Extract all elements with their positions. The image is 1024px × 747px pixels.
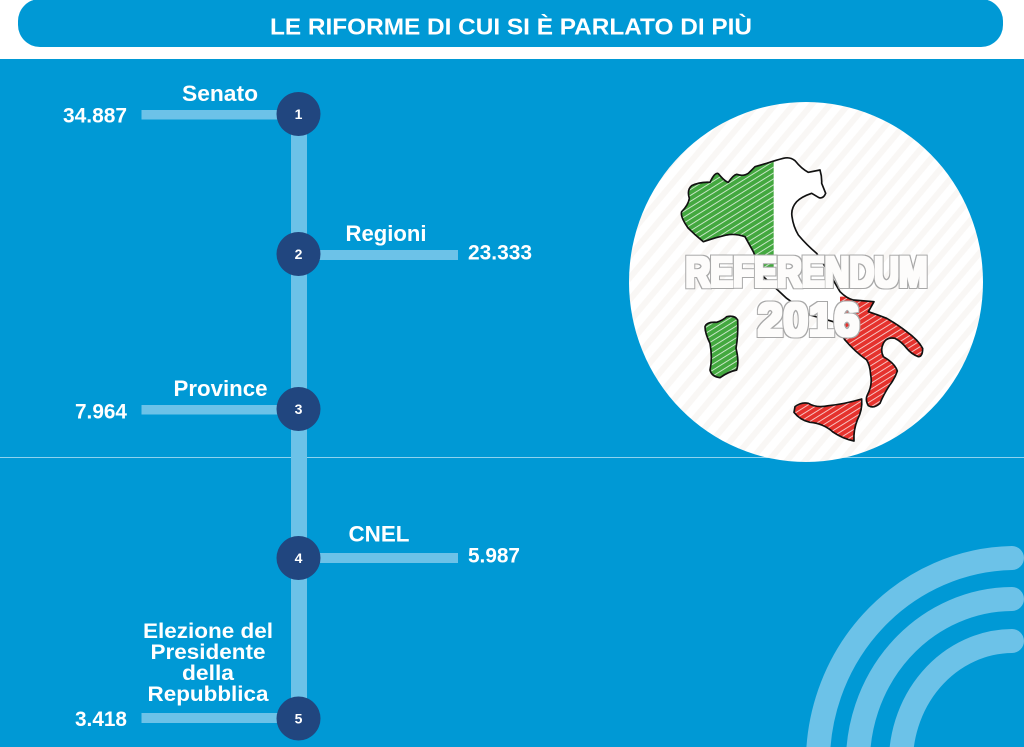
badge heading	[686, 248, 928, 346]
item 5: Elezione del Presidente della Repubblica: Repubblica	[148, 683, 269, 706]
item 2: Regioni: Regioni	[346, 221, 426, 246]
item 1: Senato: 34.887	[63, 104, 127, 128]
item 3: Province: Province	[174, 376, 268, 401]
item 5: Elezione del Presidente della Repubblica: 3.418	[75, 708, 127, 731]
title banner	[18, 0, 1003, 47]
item 3: Province: 7.964	[75, 400, 127, 424]
vertical connector	[291, 114, 307, 718]
item 4: CNEL: 4	[295, 550, 303, 566]
item 1: Senato	[63, 81, 320, 136]
item 5: Elezione del Presidente della Repubblica: 5	[295, 710, 303, 726]
timeline chart	[63, 81, 532, 740]
item 2: Regioni: 2	[295, 246, 303, 262]
item 1: Senato: Senato	[182, 81, 258, 106]
item 4: CNEL: CNEL	[348, 522, 410, 546]
icon: map of Italy	[681, 158, 923, 441]
item 2: Regioni: 23.333	[468, 242, 532, 264]
item 3: Province	[75, 376, 320, 431]
item 3: Province: 3	[295, 401, 303, 417]
item 5: Elezione del Presidente della Repubblica: Presidente	[150, 641, 266, 664]
item 5: Elezione del Presidente della Repubblica	[75, 620, 320, 740]
item 5: Elezione del Presidente della Repubblica: della	[182, 662, 234, 685]
item 2: Regioni	[276, 221, 532, 276]
item 4: CNEL: 5.987	[468, 544, 520, 568]
decorative arcs	[818, 558, 1012, 747]
item 5: Elezione del Presidente della Repubblica: Elezione del	[143, 620, 273, 643]
referendum badge	[629, 102, 983, 462]
badge heading: 2016	[758, 294, 860, 346]
title: LE RIFORME DI CUI SI È PARLATO DI PIÙ	[270, 12, 752, 40]
item 1: Senato: 1	[295, 106, 303, 122]
badge heading: REFERENDUM	[686, 248, 928, 296]
item 4: CNEL	[276, 522, 520, 580]
